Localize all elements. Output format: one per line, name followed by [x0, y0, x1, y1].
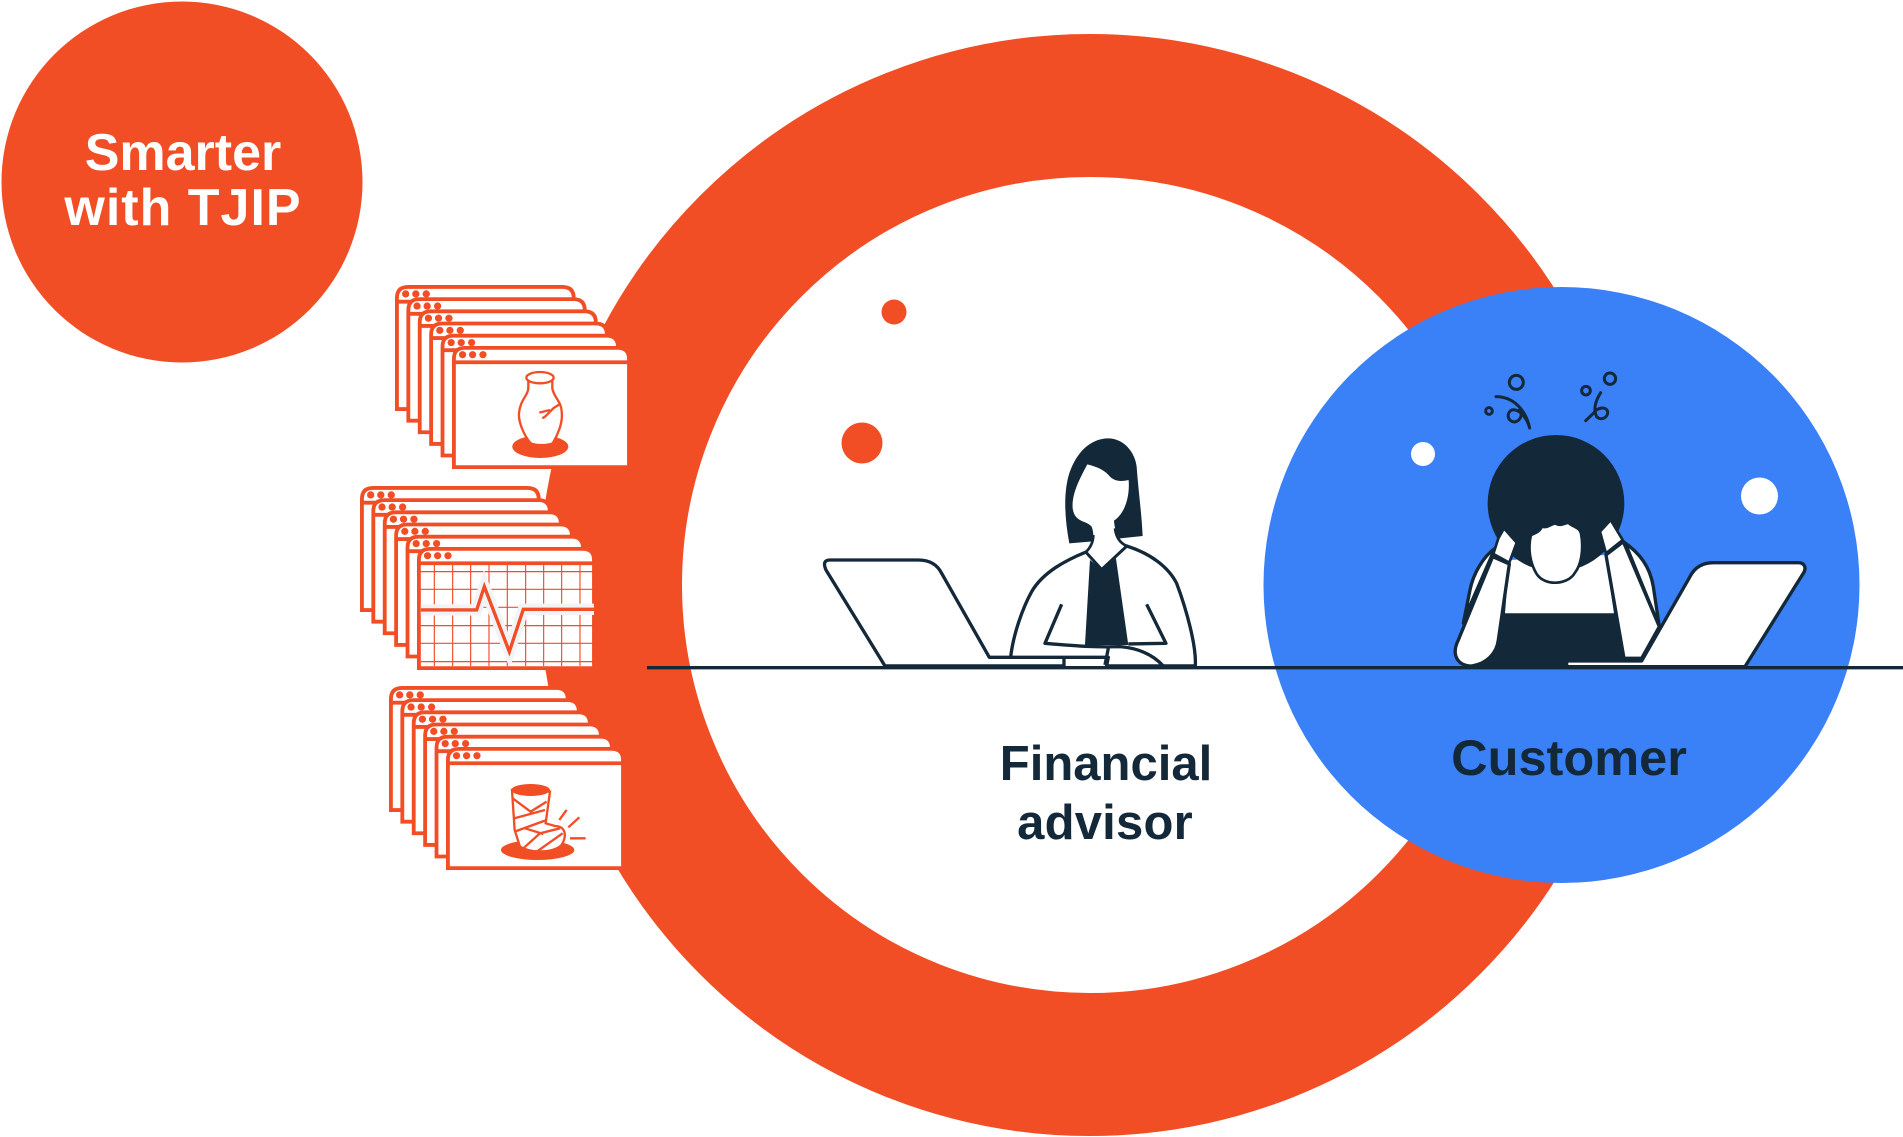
customer right arm and hand	[1606, 542, 1659, 658]
customer chest	[1505, 555, 1614, 613]
window stack: vase records	[397, 287, 629, 467]
illustration: stressed customer with laptop	[1455, 373, 1805, 667]
window stack: broken-leg records	[391, 688, 623, 868]
window stack: heart-rate records	[362, 488, 594, 668]
decorative dots: customer side	[1411, 442, 1778, 514]
illustration: financial advisor with laptop	[825, 438, 1195, 666]
customer face	[1529, 523, 1582, 583]
label: Financial advisor: Financial	[1000, 737, 1212, 791]
customer left arm and hand	[1455, 557, 1509, 666]
customer laptop	[1567, 563, 1805, 667]
advisor hair	[1065, 438, 1143, 543]
advisor collar	[1086, 528, 1127, 569]
table line	[647, 666, 1903, 669]
advisor shirt	[1085, 558, 1128, 645]
blue customer circle	[1264, 287, 1860, 883]
badge: Smarter with TJIP: Smarter	[85, 124, 281, 182]
advisor laptop	[825, 560, 1064, 666]
label: Financial advisor	[1000, 737, 1212, 850]
large orange ring	[610, 106, 1570, 1064]
chart: heartbeat grid	[421, 564, 594, 666]
icon: leg in cast	[501, 784, 586, 860]
customer hair	[1488, 435, 1624, 572]
label: Customer: Customer	[1451, 729, 1687, 786]
icon: cracked vase	[512, 372, 568, 458]
badge: Smarter with TJIP: with TJIP	[63, 179, 302, 237]
advisor face	[1073, 464, 1129, 569]
customer back shoulders	[1463, 542, 1659, 627]
label: Financial advisor: advisor	[1017, 796, 1193, 850]
customer torso	[1463, 557, 1627, 667]
badge: Smarter with TJIP	[2, 2, 362, 362]
confusion squiggles	[1486, 373, 1616, 428]
decorative dots: advisor side	[842, 300, 906, 464]
advisor body	[1011, 546, 1195, 666]
advisor arms	[1045, 604, 1166, 666]
